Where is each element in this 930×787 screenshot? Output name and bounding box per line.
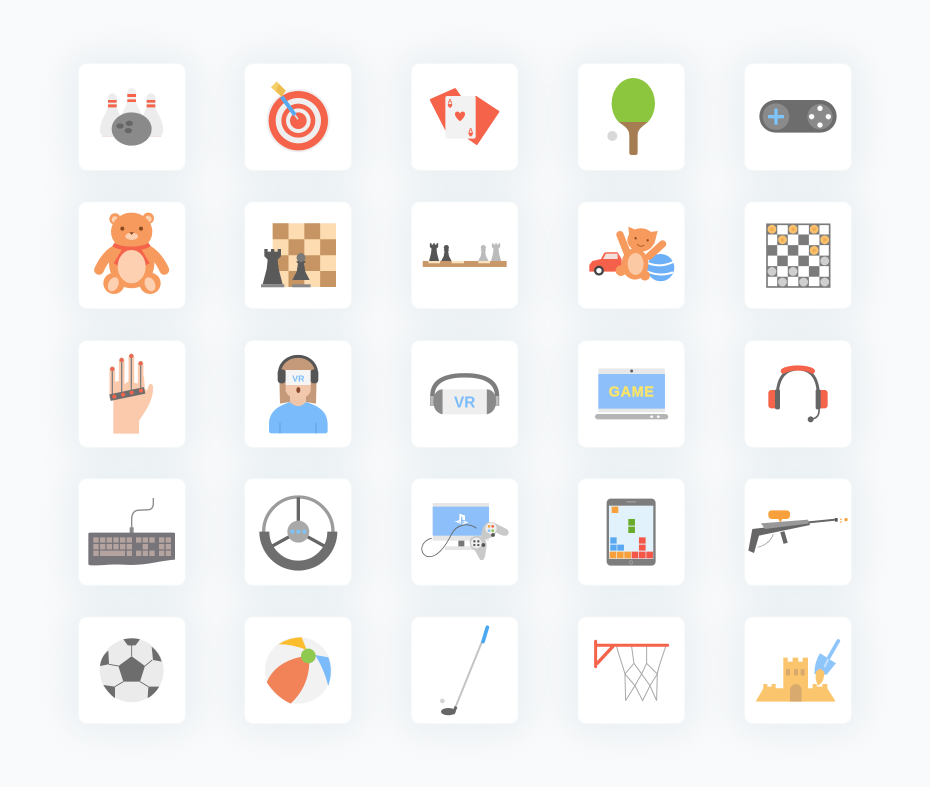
icon: steering wheel — [264, 497, 333, 566]
icon: ace of hearts cards: A — [448, 98, 453, 105]
panel: VR woman — [245, 341, 351, 447]
panel: headset — [745, 341, 851, 447]
panel: beach ball — [245, 617, 351, 723]
panel: keyboard — [79, 479, 185, 585]
panel: chess shelf — [412, 202, 518, 308]
icon: ace of hearts cards: A — [468, 127, 473, 134]
icon: checkers board — [767, 224, 830, 287]
icon: chess pieces on board edge — [423, 243, 507, 267]
panel: archery target — [245, 64, 351, 170]
icon: basketball hoop and net — [596, 641, 668, 701]
icon: hand with sensors — [110, 354, 153, 434]
panel: sand castle — [745, 617, 851, 723]
panel: bowling — [79, 64, 185, 170]
panel: console — [412, 479, 518, 585]
icon: ace of hearts cards — [431, 89, 498, 144]
icon: laptop with GAME screen: GAME — [609, 385, 654, 401]
panel: table tennis — [578, 64, 684, 170]
icon: sand castle and shovel — [756, 641, 838, 702]
panel: teddy bear — [79, 202, 185, 308]
icon: game controller — [759, 100, 837, 133]
icon: paintball marker — [748, 510, 848, 553]
icon: monitor with game controllers — [422, 503, 509, 560]
icon: chess board and pieces — [261, 223, 336, 287]
panel: motion glove — [79, 341, 185, 447]
panel: chess board — [245, 202, 351, 308]
icon: beach ball — [265, 637, 332, 704]
panel: soccer ball — [79, 617, 185, 723]
panel: golf club — [412, 617, 518, 723]
panel: laptop game — [578, 341, 684, 447]
panel: steering wheel — [245, 479, 351, 585]
icon: tablet with falling blocks — [607, 499, 656, 566]
icon: gaming headset — [768, 368, 828, 422]
icon: golf club and ball — [440, 627, 487, 715]
panel: VR headset — [412, 341, 518, 447]
icon: cat, car and ball — [589, 227, 674, 281]
panel: checkers — [745, 202, 851, 308]
icon: soccer ball — [100, 638, 164, 702]
panel: tablet game — [578, 479, 684, 585]
panel: gamepad — [745, 64, 851, 170]
icon: VR headset: VR — [454, 394, 475, 411]
icon: bowling pins and ball — [100, 88, 163, 146]
panel: playing cards — [412, 64, 518, 170]
panel: basketball hoop — [578, 617, 684, 723]
icon: ping pong paddle and ball — [607, 78, 655, 155]
icon: teddy bear — [99, 213, 164, 294]
icon: target with dart — [267, 81, 330, 152]
icon: ergonomic keyboard — [88, 498, 175, 565]
panel: paintball gun — [745, 479, 851, 585]
panel: toys — [578, 202, 684, 308]
icon: woman wearing VR headset: VR — [292, 373, 305, 383]
